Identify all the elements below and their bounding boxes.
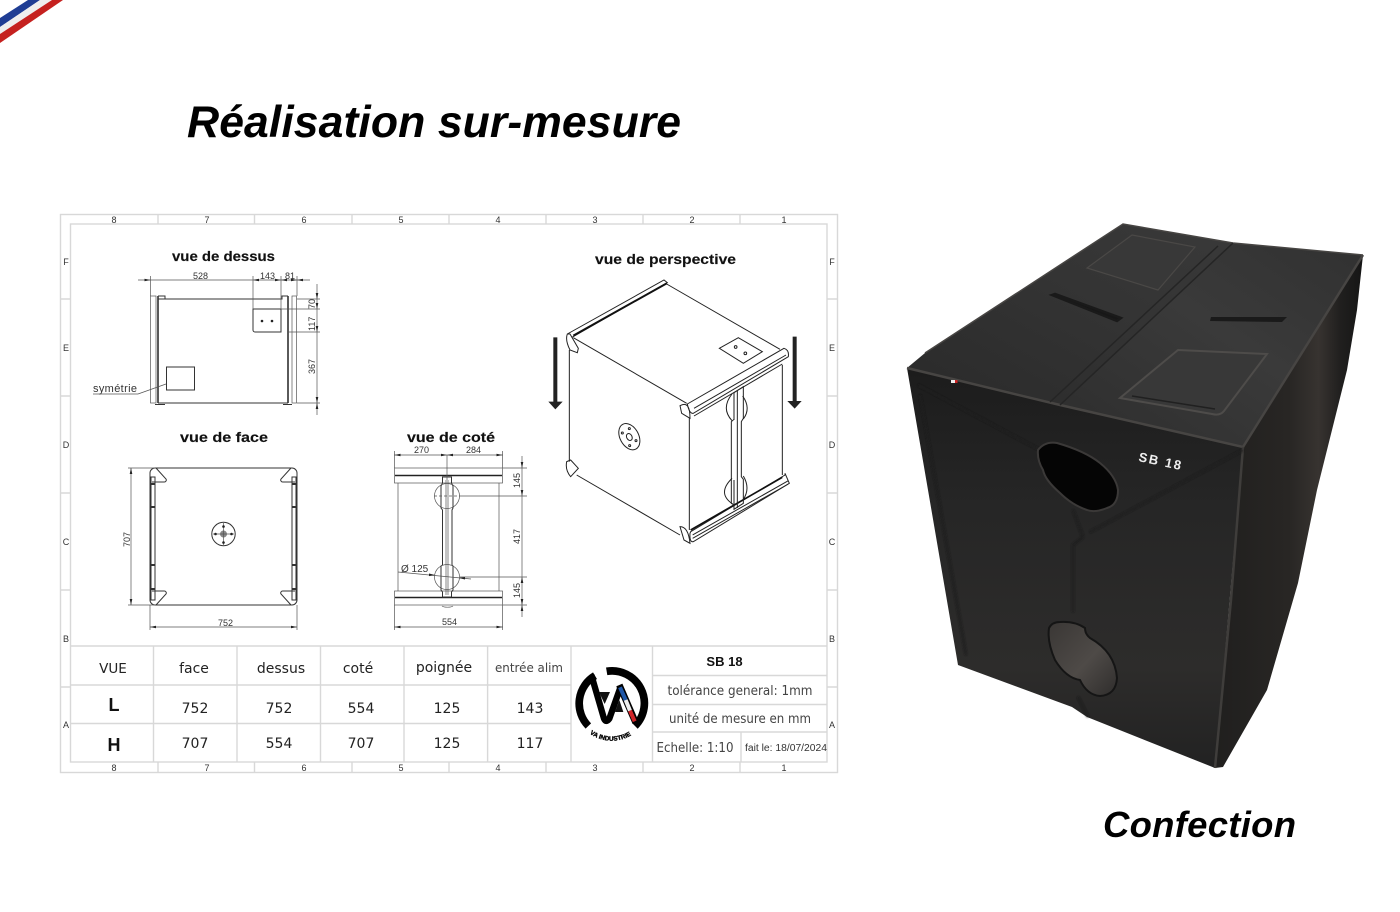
cover: top panel right: [1060, 243, 1363, 447]
specification table: entrée alim: [495, 660, 563, 675]
arrow: left down: [548, 337, 563, 409]
sheet frame: C: [829, 537, 836, 547]
sheet frame: 1: [781, 763, 787, 773]
drawing: front view: 752: [218, 618, 233, 628]
specification table: H: [108, 735, 120, 755]
specification table: L: [108, 695, 120, 715]
sheet frame: 6: [301, 763, 307, 773]
specification table: 125: [434, 701, 460, 717]
specification table: 125: [434, 736, 460, 752]
sheet frame: 2: [689, 763, 695, 773]
cover: SB 18 text: SB 18: [1137, 449, 1183, 473]
sheet frame: 6: [301, 215, 307, 225]
sheet frame: F: [63, 257, 69, 267]
drawing: perspective view: [548, 280, 802, 543]
specification table: 707: [182, 736, 208, 752]
sheet frame: 3: [592, 215, 598, 225]
drawing: side view: 554: [442, 617, 457, 627]
caption: Confection: Confection: [1103, 804, 1296, 845]
cover: strap right: [1210, 317, 1287, 322]
drawing: top view: [93, 271, 320, 415]
sheet frame: 8: [111, 763, 117, 773]
sheet frame: C: [63, 537, 70, 547]
sheet frame: [60, 214, 838, 773]
specification table: fait le: 18/07/2024: [745, 743, 827, 754]
drawing: side view: 284: [466, 445, 481, 455]
drawing: top view: symétrie: [93, 383, 137, 395]
logo: VA Industrie: VA INDUSTRIE: [590, 730, 632, 741]
drawing: side view: 145: [512, 473, 522, 488]
sheet frame: 2: [689, 215, 695, 225]
specification table: 554: [266, 736, 292, 752]
specification table: 143: [517, 701, 543, 717]
specification table: 554: [348, 701, 374, 717]
sheet frame: 5: [398, 215, 404, 225]
photo: black fabric cover: [907, 224, 1363, 768]
drawing: side view: 270: [414, 445, 429, 455]
specification table: coté: [343, 661, 373, 677]
specification table: 117: [517, 736, 543, 752]
logo: VA Industrie: [575, 667, 648, 741]
drawing: side view: 417: [512, 529, 522, 544]
sheet frame: 5: [398, 763, 404, 773]
cover: strap rear: [1052, 294, 1121, 321]
drawing: side view: Ø 125: [401, 564, 429, 575]
sheet frame: 7: [204, 215, 210, 225]
sheet frame: 8: [111, 215, 117, 225]
sheet frame: F: [829, 257, 835, 267]
specification table: dessus: [257, 661, 305, 677]
cover: right side panel: [1215, 255, 1363, 768]
technical drawing sheet: [60, 214, 838, 774]
specification table: 707: [348, 736, 374, 752]
specification table: Echelle: 1:10: [656, 741, 734, 756]
specification table: [70, 646, 827, 762]
drawing: side view: 145: [512, 583, 522, 598]
drawing: top view: 528: [193, 271, 208, 281]
heading: vue de coté: vue de coté: [407, 429, 495, 445]
drawing: top view: 81: [285, 271, 295, 281]
specification table: 752: [182, 701, 208, 717]
sheet frame: A: [829, 720, 835, 730]
drawing: top view: 367: [307, 359, 317, 374]
sheet frame: E: [829, 343, 835, 353]
cover: top panel left: [907, 224, 1233, 405]
sheet frame: D: [829, 440, 836, 450]
specification table: 752: [266, 701, 292, 717]
heading: vue de dessus: vue de dessus: [172, 248, 275, 264]
cover: upper port: [1038, 443, 1118, 511]
sheet frame: D: [63, 440, 70, 450]
sheet frame: 4: [495, 763, 501, 773]
sheet frame: 3: [592, 763, 598, 773]
drawing: side view: [394, 445, 527, 630]
heading: vue de perspective: vue de perspective: [595, 251, 736, 267]
sheet frame: 4: [495, 215, 501, 225]
sheet frame: 1: [781, 215, 787, 225]
specification table: VUE: [99, 661, 127, 677]
drawing: front view: 707: [122, 532, 132, 547]
specification table: tolérance general: 1mm: [668, 684, 812, 699]
drawing: front view: [122, 468, 297, 630]
cover: pocket rear: [1087, 235, 1195, 290]
specification table: poignée: [416, 660, 472, 676]
drawing: top view: 143: [260, 271, 275, 281]
drawing: top view: 117: [307, 317, 317, 331]
arrow: right down: [787, 337, 802, 409]
sheet frame: B: [63, 634, 69, 644]
sheet frame: E: [63, 343, 69, 353]
sheet frame: B: [829, 634, 835, 644]
sheet frame: A: [63, 720, 69, 730]
cover: lower port: [1049, 622, 1117, 696]
specification table: unité de mesure en mm: [669, 712, 811, 727]
cover: front panel: [907, 368, 1243, 768]
sheet frame: 7: [204, 763, 210, 773]
flag ribbon: [0, 0, 63, 43]
cover: label tag: [951, 380, 958, 383]
title: Réalisation sur-mesure: [187, 98, 681, 147]
drawing: top view: 70: [307, 299, 317, 309]
specification table: SB 18: [706, 654, 743, 669]
cover: pocket front: [1120, 350, 1267, 415]
heading: vue de face: vue de face: [180, 429, 268, 445]
specification table: face: [179, 661, 209, 677]
